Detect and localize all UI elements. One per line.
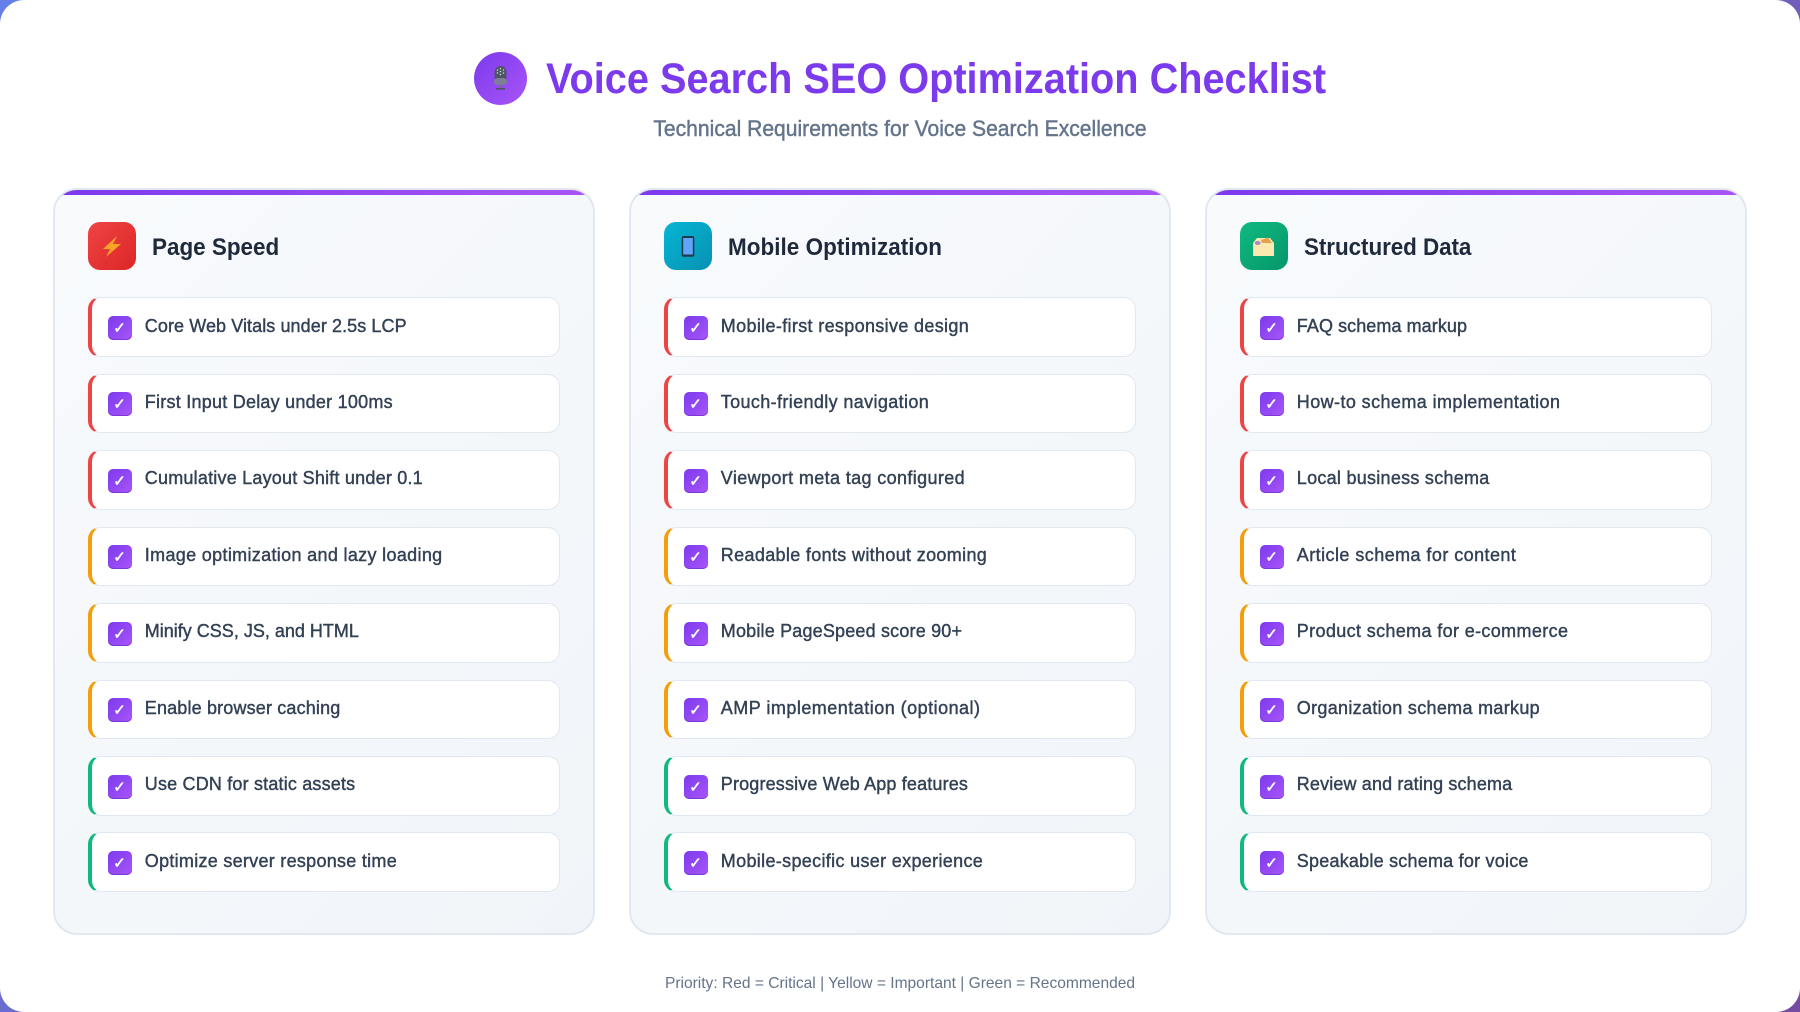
checklist: mobile optimization: ✓: [689, 472, 702, 490]
checklist: page speed: Image optimization and lazy loading: [145, 545, 443, 565]
checklist: structured data: Local business schema: [1297, 468, 1490, 488]
icon: mobile phone: [664, 222, 712, 270]
checklist: page speed: ✓: [113, 319, 126, 337]
checklist: mobile optimization: AMP implementation (optional): [721, 698, 981, 718]
title: Voice Search SEO Optimization Checklist: [546, 54, 1326, 102]
checklist: structured data: Review and rating schema: [1297, 774, 1512, 794]
checklist: structured data: Product schema for e-commerce: [1297, 621, 1568, 641]
checklist: page speed: ✓: [113, 472, 126, 490]
checklist: page speed: Use CDN for static assets: [145, 774, 355, 794]
checklist: page speed: ✓: [113, 854, 126, 872]
checklist: mobile optimization: Viewport meta tag configured: [721, 468, 965, 488]
checklist: mobile optimization: Touch-friendly navigation: [721, 392, 929, 412]
icon: lightning bolt: [88, 222, 136, 270]
checklist: mobile optimization: ✓: [689, 854, 702, 872]
subtitle: Technical Requirements for Voice Search Excellence: [653, 116, 1147, 141]
checklist: structured data: Organization schema markup: [1297, 698, 1540, 718]
checklist: page speed: ✓: [113, 548, 126, 566]
checklist: mobile optimization: ✓: [689, 778, 702, 796]
checklist: page speed: Enable browser caching: [145, 698, 340, 718]
checklist: structured data: ✓: [1265, 854, 1278, 872]
checklist: mobile optimization: ✓: [689, 701, 702, 719]
checklist: page speed: Cumulative Layout Shift under 0.1: [145, 468, 423, 488]
checklist: page speed: Minify CSS, JS, and HTML: [145, 621, 359, 641]
checklist: mobile optimization: ✓: [689, 548, 702, 566]
panel: mobile optimization: [629, 188, 1171, 935]
checklist: structured data: How-to schema implementation: [1297, 392, 1560, 412]
checklist: mobile optimization: ✓: [689, 395, 702, 413]
heading: structured data: Structured Data: [1304, 234, 1471, 261]
checklist: structured data: Speakable schema for voice: [1297, 851, 1529, 871]
checklist: page speed: ✓: [113, 778, 126, 796]
checklist: structured data: FAQ schema markup: [1297, 316, 1467, 336]
icon: microphone badge: [474, 52, 527, 105]
checklist: page speed: Optimize server response time: [145, 851, 397, 871]
checklist: mobile optimization: Mobile PageSpeed score 90+: [721, 621, 962, 641]
checklist: page speed: First Input Delay under 100ms: [145, 392, 393, 412]
icon: file folder: [1240, 222, 1288, 270]
checklist: structured data: ✓: [1265, 778, 1278, 796]
panel: structured data: [1205, 188, 1747, 935]
checklist: structured data: ✓: [1265, 395, 1278, 413]
heading: page speed: Page Speed: [152, 234, 279, 261]
panel: page speed: [53, 188, 595, 935]
checklist: page speed: ✓: [113, 625, 126, 643]
checklist: mobile optimization: ✓: [689, 319, 702, 337]
checklist: mobile optimization: Readable fonts without zooming: [721, 545, 987, 565]
checklist: page speed: ✓: [113, 395, 126, 413]
checklist: structured data: [1240, 297, 1712, 892]
checklist: page speed: ✓: [113, 701, 126, 719]
checklist: mobile optimization: [664, 297, 1136, 892]
checklist: page speed: [88, 297, 560, 892]
checklist: structured data: ✓: [1265, 319, 1278, 337]
checklist: mobile optimization: ✓: [689, 625, 702, 643]
checklist: structured data: ✓: [1265, 548, 1278, 566]
checklist: structured data: Article schema for content: [1297, 545, 1516, 565]
heading: mobile optimization: Mobile Optimization: [728, 234, 942, 261]
checklist: structured data: ✓: [1265, 472, 1278, 490]
checklist: mobile optimization: Progressive Web App features: [721, 774, 968, 794]
checklist: page speed: Core Web Vitals under 2.5s LCP: [145, 316, 407, 336]
checklist: structured data: ✓: [1265, 625, 1278, 643]
footer legend: Priority: Red = Critical | Yellow = Important | Green = Recommended: [665, 975, 1135, 992]
checklist: structured data: ✓: [1265, 701, 1278, 719]
checklist: mobile optimization: Mobile-first responsive design: [721, 316, 969, 336]
checklist: mobile optimization: Mobile-specific user experience: [721, 851, 983, 871]
